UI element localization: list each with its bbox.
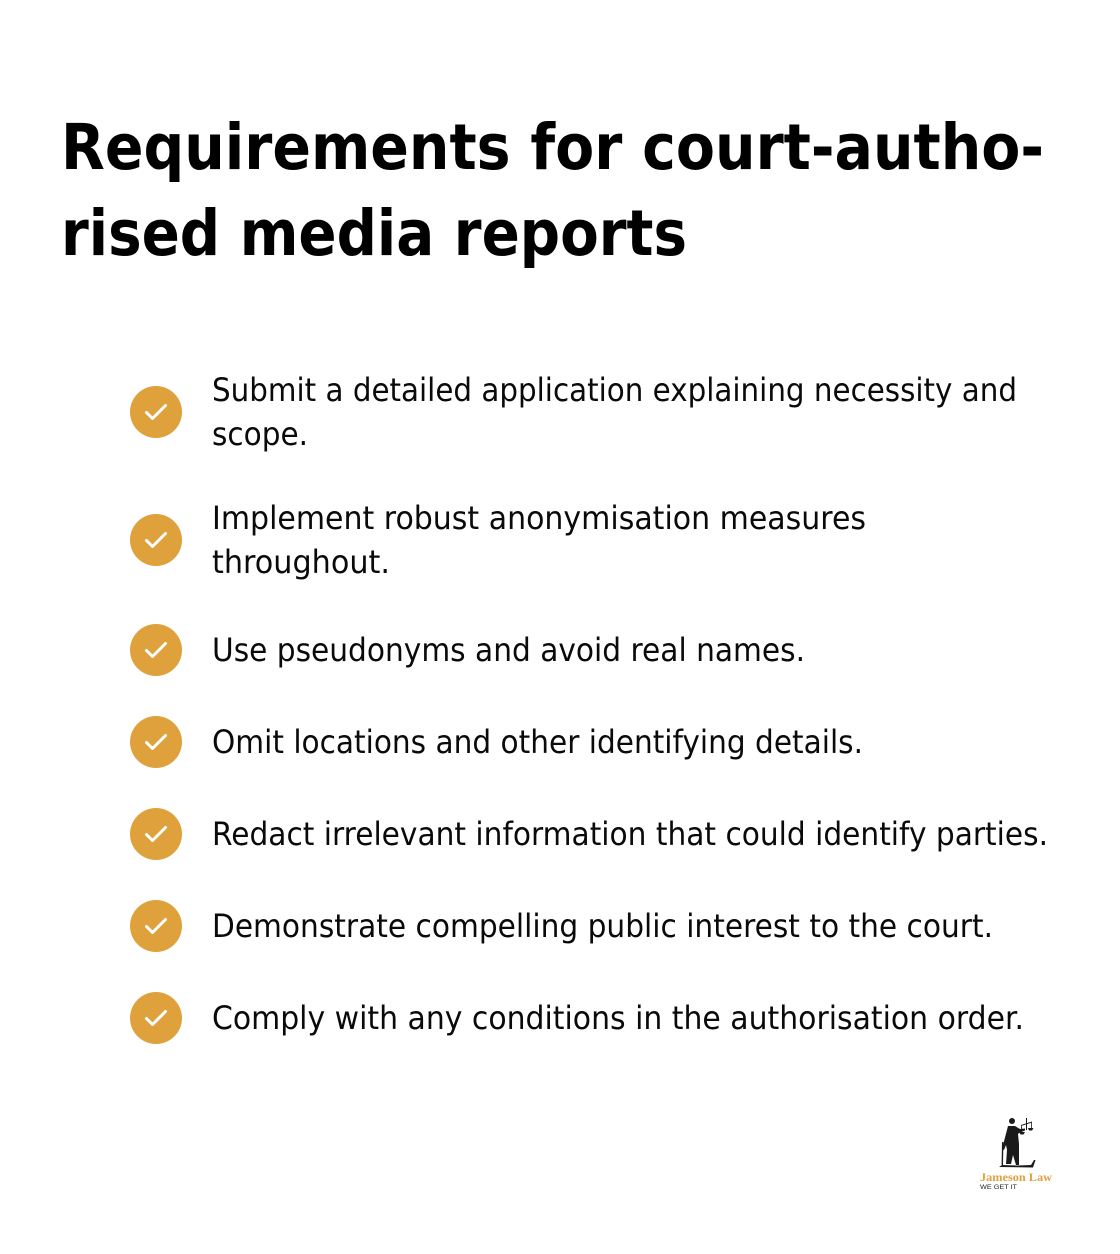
- item 4: omit locations: [130, 716, 863, 768]
- item 5: redact: [130, 808, 1048, 860]
- item 2: anonymisation: throughout.: [212, 543, 390, 581]
- item 5: redact: Redact irrelevant information that could identify parties.: [212, 815, 1048, 853]
- logo name: Jameson Law: [980, 1172, 1053, 1184]
- logo tagline: WE GET IT: [980, 1184, 1017, 1191]
- item 3: pseudonyms: Use pseudonyms and avoid real names.: [212, 631, 805, 669]
- checklist: [130, 371, 1048, 1044]
- title: Requirements for court-autho-: [61, 111, 1044, 184]
- item 7: comply: [130, 992, 1024, 1044]
- item 2: anonymisation: [130, 499, 866, 581]
- item 1: detailed application: Submit a detailed application explaining necessity and: [212, 371, 1017, 409]
- icon: lady justice: [999, 1118, 1036, 1168]
- item 1: detailed application: scope.: [212, 415, 308, 453]
- item 1: detailed application: [130, 371, 1017, 453]
- title: rised media reports: [61, 197, 687, 270]
- item 2: anonymisation: Implement robust anonymisation measures: [212, 499, 866, 537]
- item 6: public interest: Demonstrate compelling public interest to the court.: [212, 907, 993, 945]
- item 7: comply: Comply with any conditions in the authorisation order.: [212, 999, 1024, 1037]
- item 4: omit locations: Omit locations and other identifying details.: [212, 723, 863, 761]
- title: [61, 111, 1044, 270]
- logo: Jameson Law: [980, 1118, 1053, 1191]
- item 3: pseudonyms: [130, 624, 805, 676]
- item 6: public interest: [130, 900, 993, 952]
